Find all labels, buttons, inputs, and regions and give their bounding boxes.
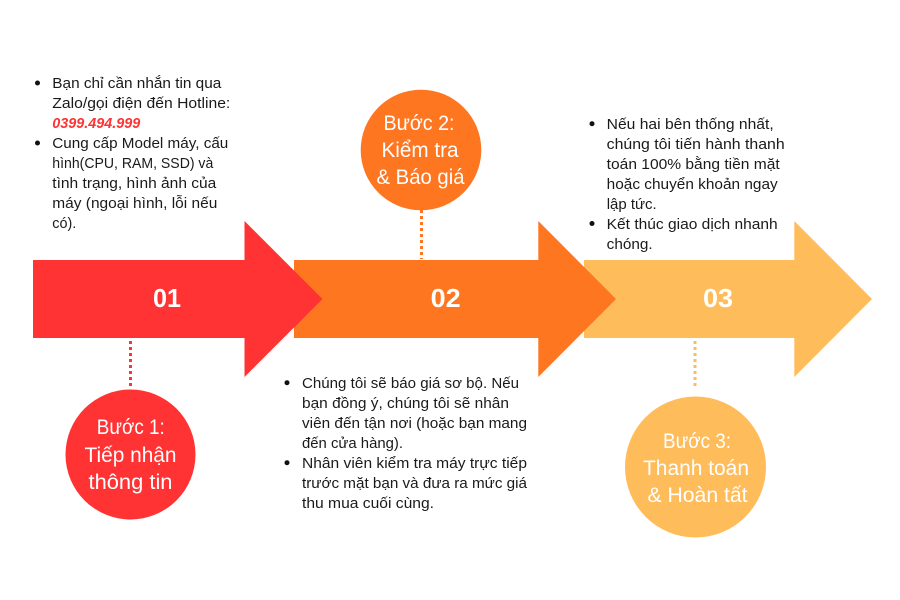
text block: step 2 details: Nhân viên kiểm tra máy trực tiếp [302, 455, 527, 472]
circle: step 1 [66, 390, 196, 520]
text block: step 1 details: tình trạng, hình ảnh của [52, 175, 217, 192]
text block: step 3 details: Nếu hai bên thống nhất, [607, 116, 774, 133]
text block: step 3 details: Kết thúc giao dịch nhanh [607, 216, 778, 233]
circle: step 3: Thanh toán [643, 457, 749, 480]
circle: step 2: Kiểm tra [382, 139, 459, 162]
arrow 03 with number: 03 [703, 283, 733, 313]
text block: step 1 details: máy (ngoại hình, lỗi nếu [52, 195, 217, 212]
circle: step 1: Tiếp nhận [84, 444, 176, 467]
circle: step 2: Bước 2: [384, 112, 454, 135]
text block: step 2 details: trước mặt bạn và đưa ra mức giá [302, 475, 528, 492]
arrow 02 with number [294, 221, 616, 377]
circle: step 3 [625, 396, 766, 538]
text block: step 1 details: Cung cấp Model máy, cấu [52, 135, 228, 152]
text block: step 1 details [35, 75, 230, 232]
text block: step 2 details: bạn đồng ý, chúng tôi sẽ nhân [302, 395, 509, 412]
text block: step 3 details: chóng. [607, 236, 653, 253]
text block: step 3 details: hoặc chuyển khoản ngay [607, 176, 778, 193]
connector: step 1 dotted line [129, 341, 132, 387]
circle: step 3: Bước 3: [663, 430, 731, 453]
text block: step 3 details: toán 100% bằng tiền mặt [607, 156, 781, 173]
text block: step 1 details: Bạn chỉ cần nhắn tin qua [52, 75, 222, 92]
circle: step 3: & Hoàn tất [648, 484, 748, 507]
text block: step 3 details [590, 116, 785, 253]
circle: step 2 [361, 90, 481, 210]
circle: step 1: thông tin [88, 471, 172, 494]
arrow 01 with number: 01 [153, 283, 181, 313]
text block: step 2 details: Chúng tôi sẽ báo giá sơ bộ. Nếu [302, 375, 519, 392]
connector: step 3 dotted line [694, 341, 696, 388]
text block: step 1 details: hình(CPU, RAM, SSD) và [52, 155, 214, 172]
text block: step 1 details: có). [52, 215, 76, 232]
text block: step 2 details: viên đến tận nơi (hoặc bạn mang [302, 415, 527, 432]
text block: step 3 details: chúng tôi tiến hành thanh [607, 136, 785, 153]
text block: step 1 details: Zalo/gọi điện đến Hotline: [52, 95, 230, 112]
text block: step 1 details: 0399.494.999 [52, 115, 141, 132]
circle: step 2: & Báo giá [376, 166, 465, 189]
arrow 01 with number [33, 221, 322, 377]
text block: step 3 details: lập tức. [607, 196, 657, 213]
circle: step 1: Bước 1: [97, 416, 165, 439]
connector: step 2 dotted line [420, 210, 423, 259]
text block: step 2 details [284, 375, 528, 512]
text block: step 2 details: đến cửa hàng). [302, 435, 403, 452]
arrow 03 with number [584, 221, 872, 377]
arrow 02 with number: 02 [431, 283, 461, 313]
text block: step 2 details: thu mua cuối cùng. [302, 495, 434, 512]
